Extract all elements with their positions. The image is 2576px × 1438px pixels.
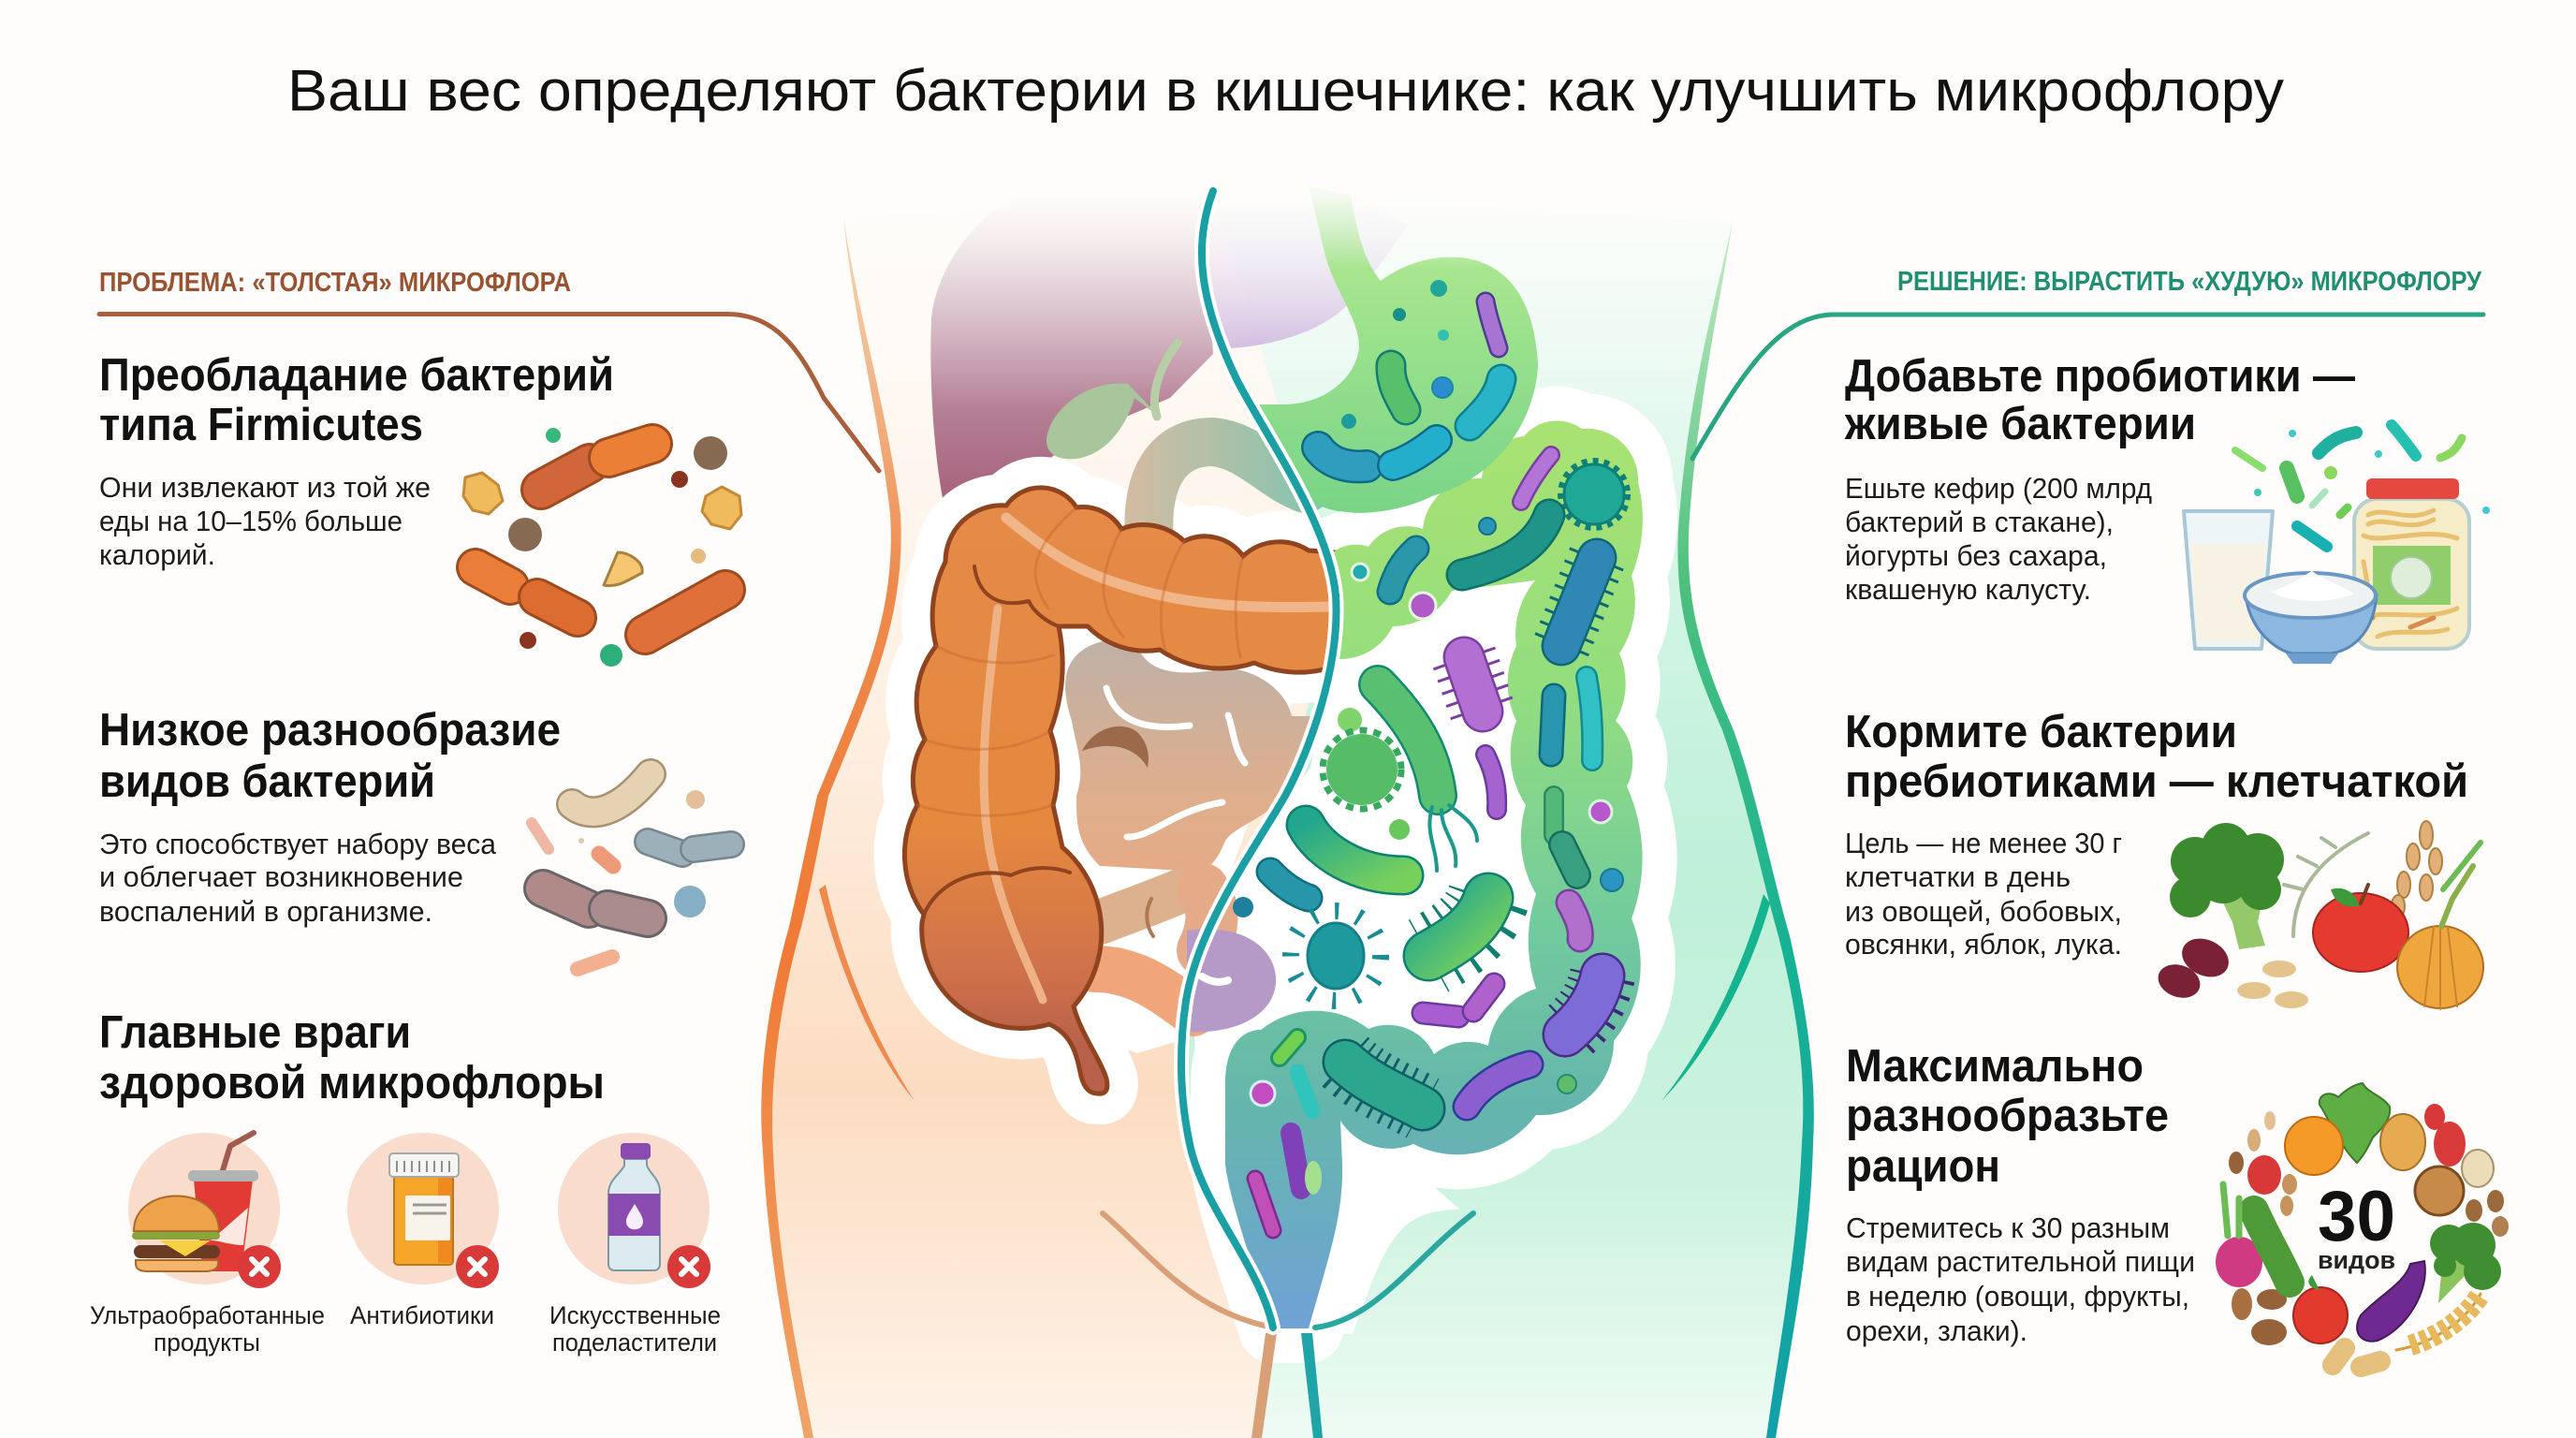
label: ultra-processed foods xyxy=(90,1301,325,1357)
purple loop xyxy=(1187,929,1276,1032)
heading: firmicutes: Преобладание бактерий xyxy=(99,350,614,401)
icon: pale sparse bacteria xyxy=(532,774,731,969)
icon: antibiotics bottle xyxy=(347,1133,499,1288)
panel: solution xyxy=(1692,267,2509,1367)
body text: firmicutes: Они извлекают из той же xyxy=(99,471,431,504)
central body illustration xyxy=(761,187,1814,1438)
icon: ring of 30 plant foods xyxy=(2216,1083,2509,1367)
liver right lobe xyxy=(1201,191,1409,348)
body text: prebiotics: Цель — не менее 30 г xyxy=(1845,827,2122,859)
label: antibiotics: Антибиотики xyxy=(350,1301,494,1329)
right colon (green, healthy) xyxy=(1225,420,1643,1328)
duodenum arch xyxy=(1149,442,1306,543)
heading: low diversity xyxy=(99,705,561,807)
pelvic crease right xyxy=(1315,1213,1473,1328)
icon: fibre foods xyxy=(2154,821,2483,1009)
haustra folds xyxy=(917,507,1243,815)
free bacteria in white zone xyxy=(1233,657,1497,1017)
heading: probiotics xyxy=(1844,351,2355,449)
liver xyxy=(930,192,1213,507)
heading: diversify xyxy=(1846,1041,2169,1192)
white halo right colon xyxy=(1225,420,1643,1328)
heading: low diversity: Низкое разнообразие xyxy=(99,705,561,756)
body text: probiotics: йогурты без сахара, xyxy=(1845,539,2107,572)
heading: low diversity: видов бактерий xyxy=(99,756,435,807)
taenia stripes xyxy=(984,518,1329,1000)
icon: burger and soda xyxy=(128,1133,281,1288)
body text: diversify xyxy=(1846,1211,2195,1347)
icon: sweetener bottle xyxy=(558,1133,710,1288)
heading: prebiotics: Кормите бактерии xyxy=(1845,707,2237,757)
label: sweeteners xyxy=(549,1301,721,1357)
body text: low diversity: воспалений в организме. xyxy=(99,895,432,928)
icon: kefir, yogurt and sauerkraut xyxy=(2184,425,2490,664)
white inner abdomen right xyxy=(1193,571,1573,1334)
body text: prebiotics: овсянки, яблок, лука. xyxy=(1845,928,2122,961)
body right half (solution) xyxy=(1184,191,1808,1438)
icon: orange firmicutes bacteria xyxy=(463,428,741,667)
label: ultra-processed foods: Ультраобработанные xyxy=(90,1301,325,1329)
body outline left xyxy=(761,218,901,1438)
body text: diversify: в неделю (овощи, фрукты, xyxy=(1846,1280,2189,1313)
body text: diversify: Стремитесь к 30 разным xyxy=(1846,1211,2170,1244)
body outline right xyxy=(1677,222,1814,1438)
central divider line xyxy=(1181,191,1337,1328)
body text: firmicutes: калорий. xyxy=(99,538,215,571)
heading: firmicutes xyxy=(99,350,614,450)
heading: diversify: Максимально xyxy=(1846,1041,2144,1092)
heading: diversify: разнообразьте xyxy=(1846,1091,2169,1141)
label: sweeteners: поделастители xyxy=(552,1328,717,1357)
label: 30: 30 xyxy=(2318,1177,2395,1256)
section header: problem: ПРОБЛЕМА: «ТОЛСТАЯ» МИКРОФЛОРА xyxy=(99,268,571,298)
body text: firmicutes xyxy=(99,471,431,571)
heading: firmicutes: типа Firmicutes xyxy=(99,400,423,450)
body text: probiotics: Ешьте кефир (200 млрд xyxy=(1845,472,2152,505)
connector line: solution xyxy=(1692,315,2483,459)
body text: diversify: видам растительной пищи xyxy=(1846,1245,2195,1278)
body text: prebiotics: клетчатки в день xyxy=(1845,860,2071,893)
body text: diversify: орехи, злаки). xyxy=(1846,1314,2027,1347)
gallbladder xyxy=(1046,343,1178,459)
section header: solution: РЕШЕНИЕ: ВЫРАСТИТЬ «ХУДУЮ» МИКРОФЛОРУ xyxy=(1897,267,2482,297)
heading: enemies: Главные враги xyxy=(99,1007,411,1058)
body text: low diversity xyxy=(99,828,497,928)
label: kinds: видов xyxy=(2318,1246,2395,1274)
heading: prebiotics xyxy=(1845,707,2468,807)
pelvic crease left xyxy=(1103,1213,1273,1328)
body left half (problem) xyxy=(768,191,1336,1438)
bacteria in stomach xyxy=(1318,280,1501,466)
inner waist line right xyxy=(1661,894,1770,1101)
body text: low diversity: Это способствует набору веса xyxy=(99,828,497,860)
body text: prebiotics xyxy=(1845,827,2122,961)
body text: probiotics: бактерий в стакане), xyxy=(1845,506,2114,538)
body text: prebiotics: из овощей, бобовых, xyxy=(1845,895,2122,928)
bacteria in transverse and descending colon xyxy=(1352,455,1628,1107)
heading: diversify: рацион xyxy=(1846,1141,2000,1192)
label: ultra-processed foods: продукты xyxy=(154,1328,260,1357)
heading: probiotics: Добавьте пробиотики — xyxy=(1845,351,2355,402)
left colon (orange) xyxy=(904,488,1334,1093)
panel: problem xyxy=(90,268,879,1357)
white inner abdomen left xyxy=(1058,599,1329,1053)
heading: enemies xyxy=(99,1007,605,1108)
label: sweeteners: Искусственные xyxy=(549,1301,721,1329)
heading: enemies: здоровой микрофлоры xyxy=(99,1058,605,1108)
heading: prebiotics: пребиотиками — клетчаткой xyxy=(1845,756,2468,807)
leg line right xyxy=(1301,1333,1323,1438)
stomach xyxy=(1250,187,1538,513)
body text: firmicutes: еды на 10–15% больше xyxy=(99,505,402,537)
title: Ваш вес определяют бактерии в кишечнике: как улучшить микрофлору xyxy=(287,59,2284,124)
body text: probiotics xyxy=(1845,472,2152,606)
body text: probiotics: квашеную калусту. xyxy=(1845,573,2091,606)
colon fold lines xyxy=(924,566,1070,915)
inner waist line left xyxy=(819,885,915,1101)
small intestine xyxy=(1065,639,1315,1013)
white halo left colon xyxy=(904,488,1334,1093)
heading: probiotics: живые бактерии xyxy=(1844,399,2196,449)
leg line left xyxy=(1251,1333,1277,1438)
body text: low diversity: и облегчает возникновение xyxy=(99,860,463,893)
connector line: problem xyxy=(99,314,879,471)
bacteria in sigmoid colon xyxy=(1251,1037,1423,1230)
